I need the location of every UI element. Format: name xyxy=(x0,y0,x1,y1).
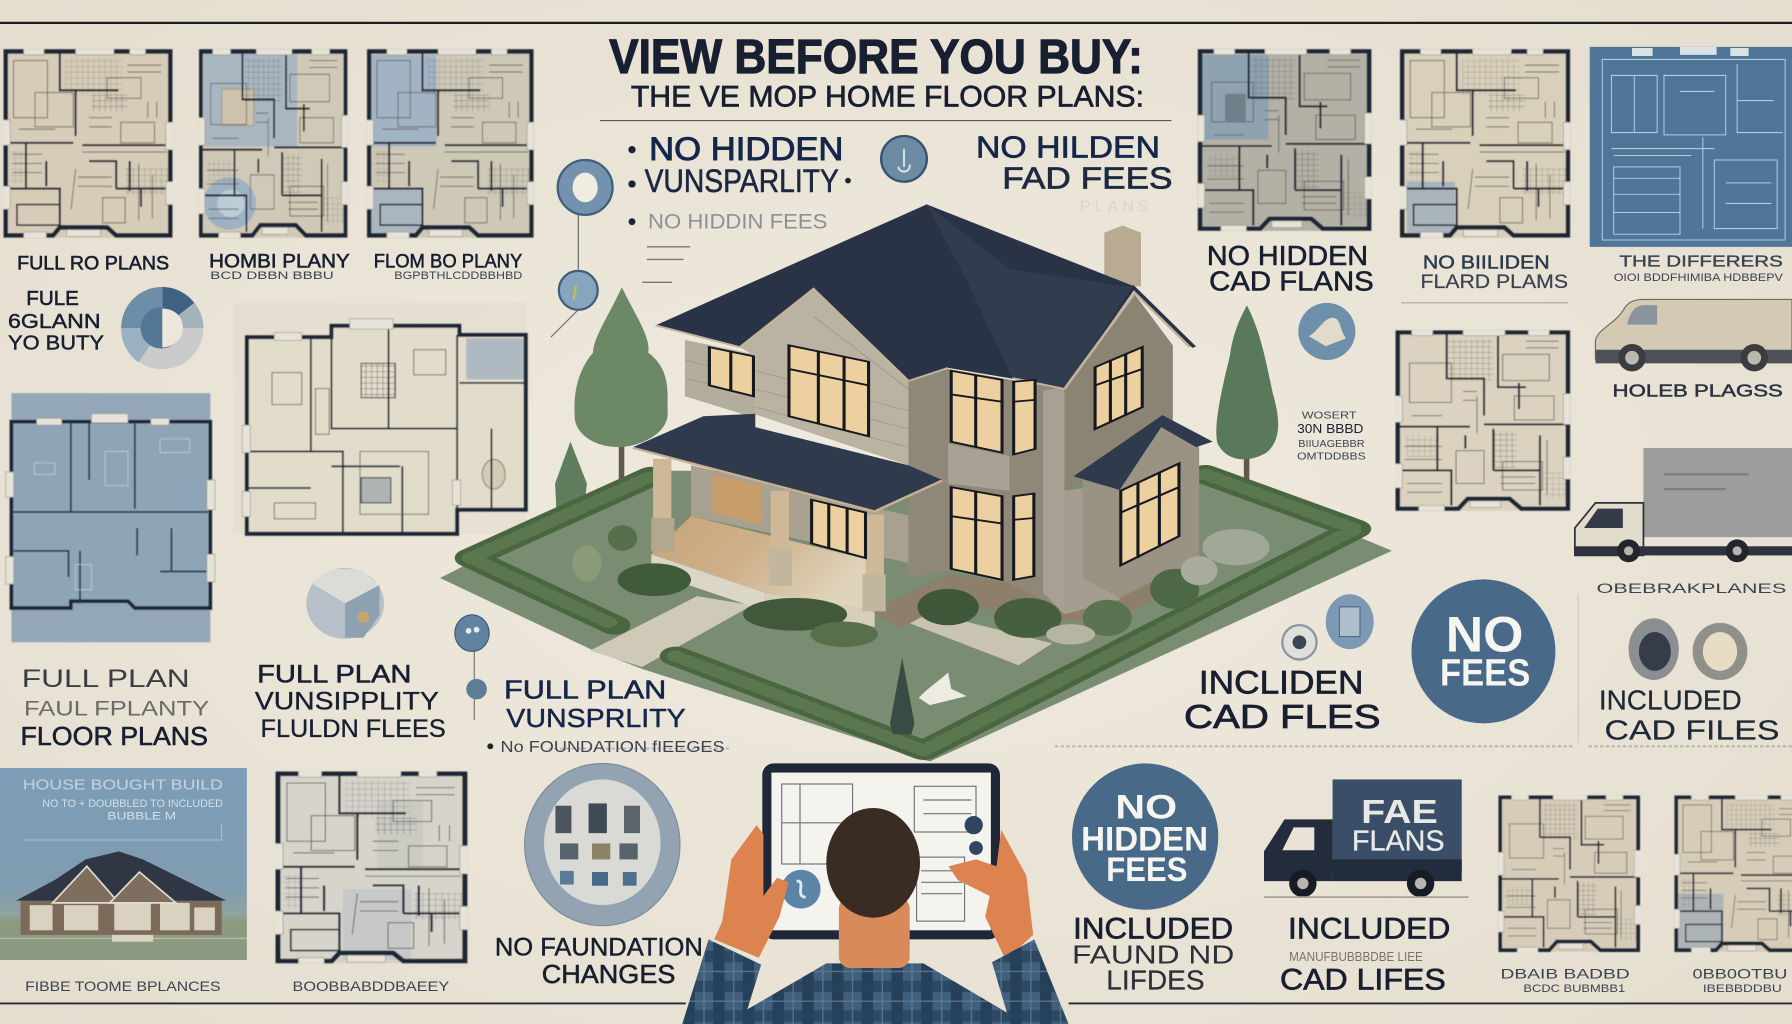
text: included cad lifes: CAD LIFES xyxy=(1280,964,1446,997)
text block: full plan visibility centre-left: VUNSIPPLITY xyxy=(255,688,439,716)
labels under right plans xyxy=(1207,240,1783,296)
text block: full plan visibility centre: FULL PLAN xyxy=(504,674,666,704)
walkways xyxy=(590,596,1052,667)
icon: oval panel xyxy=(525,763,680,926)
blue card with house xyxy=(0,768,247,960)
text: included foundation lifes xyxy=(1072,912,1234,996)
bullet list: left: NO HIDDIN FEES xyxy=(648,209,827,234)
labels under right plans: CAD FLANS xyxy=(1209,265,1374,296)
icon: faceted gem xyxy=(306,568,384,639)
text: no foundation changes: CHANGES xyxy=(542,959,675,989)
labels under right plans: NO BIILIDEN xyxy=(1423,252,1550,273)
lawn ornament xyxy=(890,658,967,734)
labels under right plans: OIOI BDDFHIMIBA HDBBEPV xyxy=(1614,272,1783,284)
icon: round gauge xyxy=(881,136,927,182)
floor plan 3 xyxy=(365,46,536,239)
panel: included cad files right: INCLUDED xyxy=(1599,685,1742,716)
text block: full plan visibility centre-left: FLULDN FLEES xyxy=(261,715,446,743)
badge: no hidden fees: FEES xyxy=(1106,851,1187,889)
bottom captions xyxy=(25,979,450,995)
bottom captions: FIBBE TOOME BPLANCES xyxy=(25,979,221,995)
text block: full plan visibility centre: VUNSPRLITY xyxy=(506,703,686,733)
panel: included cad files right: CAD FILES xyxy=(1605,714,1779,745)
bullet list: left xyxy=(628,131,851,234)
blue card with house: BUBBLE M xyxy=(107,810,176,822)
labels under top-left plans: BCD DBBN BBBU xyxy=(210,270,334,282)
subtitle: THE VE MOP HOME FLOOR PLANS: xyxy=(631,80,1144,113)
neck and hair xyxy=(826,808,920,968)
text: no foundation changes xyxy=(495,933,703,989)
side text: full plan to buy: 6GLANN xyxy=(8,310,101,333)
bottom right floor plan 2 xyxy=(1672,793,1792,953)
house illustration xyxy=(440,204,1392,761)
tiny text column: BIIUAGEBBR xyxy=(1298,439,1365,450)
bullet text: right: FAD FEES xyxy=(1002,161,1173,196)
icon: navy truck: FLANS xyxy=(1352,825,1445,857)
tiny text column: WOSERT xyxy=(1302,410,1357,421)
icons: left timeline xyxy=(551,160,690,337)
blueprint xyxy=(1590,47,1792,247)
badge: no hidden fees: HIDDEN xyxy=(1081,820,1208,858)
icon: navy truck xyxy=(1264,779,1469,897)
labels under top-left plans xyxy=(17,250,522,282)
panel: included cad files right xyxy=(1597,581,1786,745)
right beige floor plan xyxy=(1398,46,1573,239)
panel: included cad files right: OBEBRAKPLANES xyxy=(1597,581,1786,596)
greyscale floor plan xyxy=(273,768,470,965)
labels under top-left plans: FLOM BO PLANY xyxy=(374,250,522,272)
small lens icons xyxy=(1282,594,1374,659)
lawn xyxy=(440,471,1392,761)
bullet list: left: VUNSPARLITY xyxy=(645,163,839,199)
icon: grey delivery truck xyxy=(1575,448,1792,562)
text: included foundation lifes: FAUND ND xyxy=(1072,939,1234,969)
text: no foundation changes: NO FAUNDATION xyxy=(495,933,703,961)
text: included cad lifes: MANUFBUBBBDBE LIEE xyxy=(1289,950,1423,964)
porch roof and columns xyxy=(633,414,942,611)
icon: round map badge xyxy=(1298,303,1355,360)
badge: no hidden fees: NO xyxy=(1115,788,1177,826)
text block: full plan floor plans: FULL PLAN xyxy=(22,665,190,693)
blue card with house: HOUSE BOUGHT BUILD xyxy=(23,778,223,794)
sleeves and shirt xyxy=(682,939,1069,1024)
text block: full plan visibility centre-left xyxy=(255,660,446,743)
main roof xyxy=(656,204,1194,389)
badge: no fees xyxy=(1411,579,1555,723)
hedges xyxy=(471,474,1355,751)
side text: full plan to buy: FULE xyxy=(26,287,79,310)
bottom right captions: BCDC BUBMBB1 xyxy=(1523,983,1625,995)
text: included cad files centre xyxy=(1184,665,1381,736)
small house xyxy=(16,851,226,942)
icon: delivery van xyxy=(1595,299,1792,371)
title block xyxy=(609,31,1144,113)
trees behind xyxy=(555,287,1278,509)
text: included cad lifes: INCLUDED xyxy=(1288,912,1450,945)
text block: full plan floor plans: FLOOR PLANS xyxy=(21,721,208,751)
labels under right plans: NO HIDDEN xyxy=(1207,240,1368,271)
bottom right floor plan 1 xyxy=(1496,793,1642,953)
text: included foundation lifes: LIFDES xyxy=(1106,965,1205,996)
text: included foundation lifes: INCLUDED xyxy=(1073,912,1233,945)
side text: full plan to buy: YO BUTY xyxy=(8,332,104,355)
label: house plans: HOLEB PLAGSS xyxy=(1613,381,1783,401)
bottom captions: BOOBBABDDBAEEY xyxy=(293,979,450,995)
bullet text: right xyxy=(976,130,1173,215)
blue card with house: NO TO + DOUBBLED TO INCLUDED xyxy=(42,798,223,810)
right grey floor plan xyxy=(1195,46,1374,232)
labels under top-left plans: HOMBI PLANY xyxy=(209,250,350,272)
chimney xyxy=(1104,225,1141,286)
text block: full plan floor plans: FAUL FPLANTY xyxy=(24,695,209,720)
bullet text: right: NO HILDEN xyxy=(976,130,1160,165)
floor plan 2 xyxy=(197,46,349,239)
text block: full plan visibility centre-left: FULL PLAN xyxy=(257,660,411,688)
icons: small balloon pins xyxy=(455,615,489,720)
bay roof xyxy=(1074,415,1213,490)
badge: no fees: NO xyxy=(1446,605,1523,662)
text: included cad files centre: INCLIDEN xyxy=(1199,665,1363,701)
bottom right captions: DBAIB BADBD xyxy=(1501,966,1630,982)
tiny text column: OMTDDBBS xyxy=(1297,451,1366,462)
text block: full plan visibility centre xyxy=(487,674,725,756)
tiny text column xyxy=(1297,410,1366,462)
bullet text: right: PLANS xyxy=(1080,198,1149,215)
person viewing tablet xyxy=(682,763,1069,1024)
text block: full plan visibility centre: No FOUNDATION fIEEGES xyxy=(501,739,725,756)
badge: no fees: FEES xyxy=(1440,652,1530,694)
lit windows xyxy=(709,345,1179,580)
side text: full plan to buy xyxy=(8,287,104,355)
tablet xyxy=(762,763,1000,939)
badge: no hidden fees xyxy=(1072,763,1218,910)
bottom right captions: IBEBBDDBU xyxy=(1703,983,1782,995)
pie chart icon xyxy=(121,287,203,369)
text: included cad lifes xyxy=(1280,912,1450,997)
text: included cad files centre: CAD FLES xyxy=(1184,699,1381,736)
porch floor and steps xyxy=(651,516,875,627)
labels under top-left plans: BGPBTHLCDDBBHBD xyxy=(394,270,522,282)
title: VIEW BEFORE YOU BUY: xyxy=(609,31,1143,84)
bullet list: left: NO HIDDEN xyxy=(649,131,843,167)
floor plan 1 xyxy=(1,46,175,239)
labels under top-left plans: FULL RO PLANS xyxy=(17,253,169,275)
foundation xyxy=(872,556,1199,629)
right middle floor plan xyxy=(1393,327,1573,512)
text block: full plan floor plans xyxy=(21,665,209,751)
icon: navy truck: FAE xyxy=(1361,794,1438,831)
tiny text column: 30N BBBD xyxy=(1297,422,1363,436)
hands xyxy=(714,825,1033,960)
labels under right plans: FLARD PLAMS xyxy=(1421,271,1568,293)
garden plants xyxy=(572,525,1270,647)
large floor plan xyxy=(233,303,527,534)
walls xyxy=(685,289,1199,614)
bottom right captions xyxy=(1501,966,1787,995)
bottom right captions: 0BB0OTBU xyxy=(1693,966,1787,982)
blue floor plan xyxy=(6,393,215,642)
labels under right plans: THE DIFFERERS xyxy=(1619,253,1783,270)
